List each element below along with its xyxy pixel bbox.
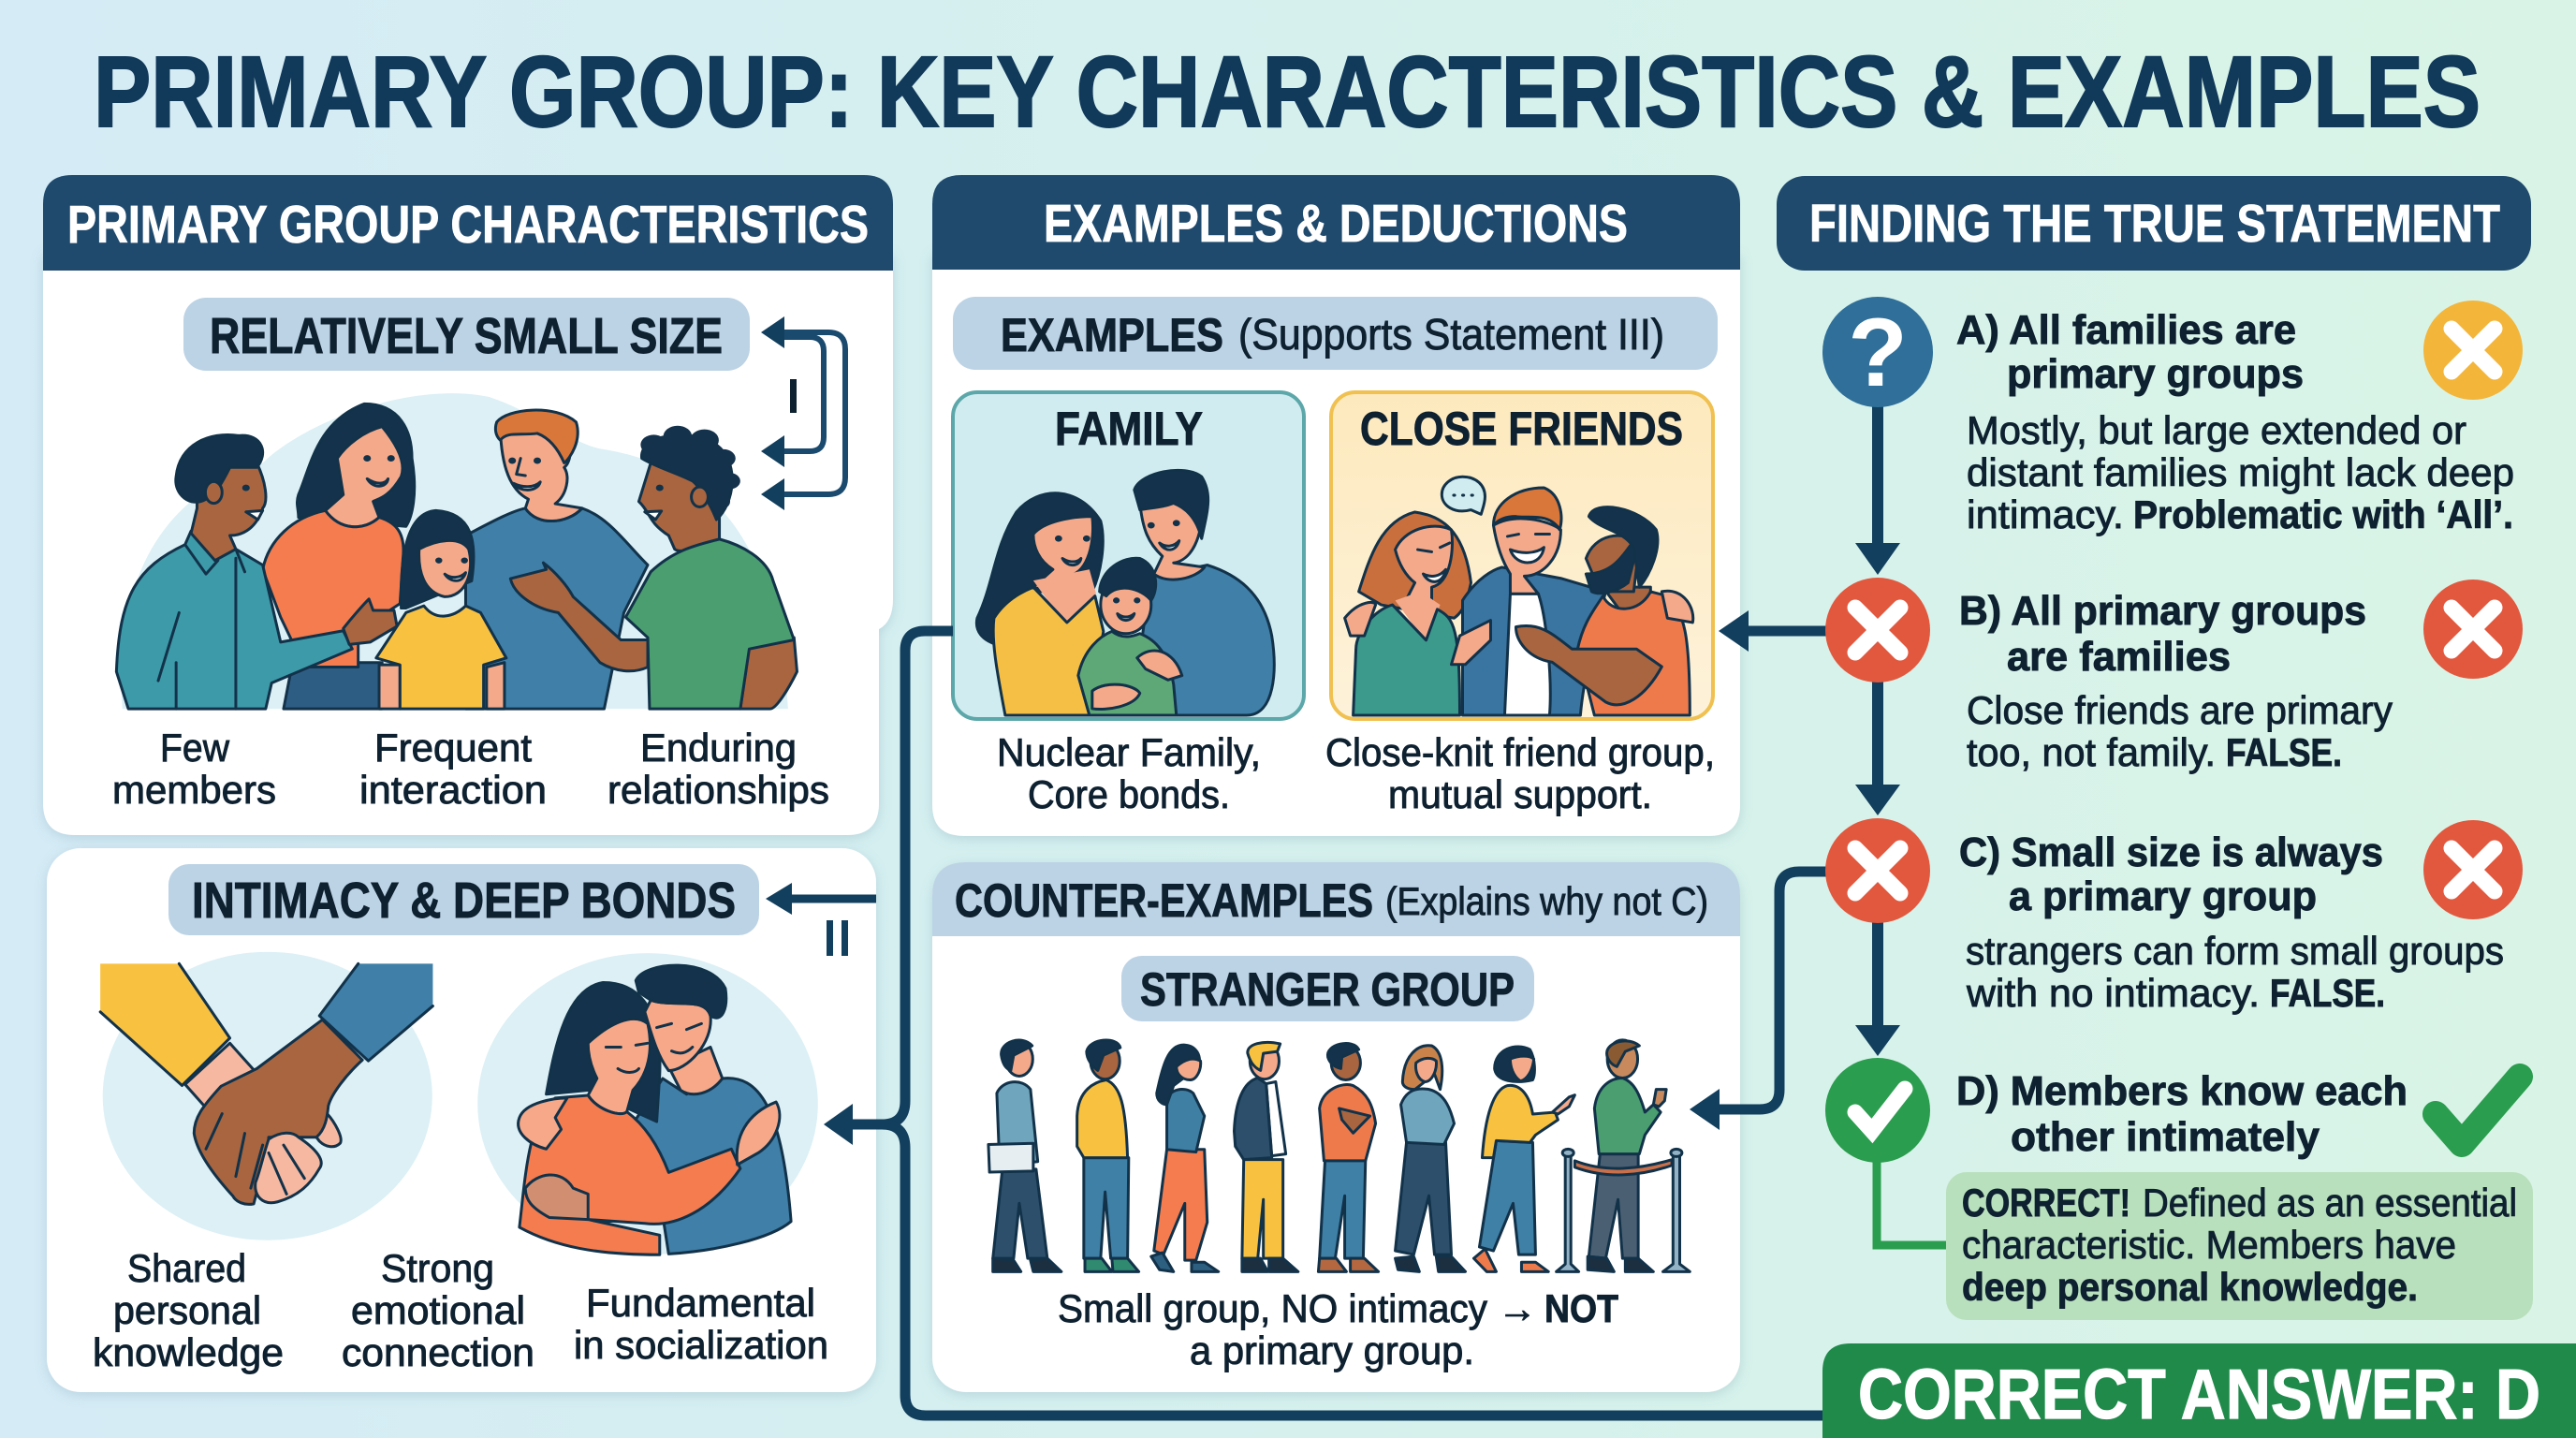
statement C <box>1959 829 2504 1015</box>
panel header <box>43 175 893 271</box>
icon: speech bubble <box>1442 477 1485 514</box>
subheading pill: small size <box>183 298 750 371</box>
panel: finding the true statement <box>1777 176 2533 1320</box>
person 5 <box>1318 1044 1379 1271</box>
illustration: three friends <box>1345 477 1693 715</box>
panel header <box>1777 176 2531 271</box>
heading: EXAMPLES & DEDUCTIONS <box>1044 194 1628 254</box>
statement C: C) Small size is always <box>1959 829 2383 875</box>
statement: small group no intimacy <box>1058 1286 1618 1372</box>
arrows: statement I bracket <box>761 316 845 510</box>
person 1 <box>988 1040 1061 1271</box>
callout: correct explanation: Defined as an essential <box>2143 1181 2517 1225</box>
statement C: strangers can form small groups <box>1966 929 2504 973</box>
statement D: other intimately <box>2011 1114 2320 1160</box>
icon: question mark: ? <box>1848 299 1908 407</box>
icon: question mark <box>1822 297 1933 407</box>
subheading pill: intimacy <box>168 864 759 935</box>
person 8 <box>1588 1040 1666 1271</box>
label: strong emotional connection: connection <box>342 1330 534 1374</box>
person 4 <box>1235 1042 1298 1271</box>
statement A: A) All families are <box>1956 307 2296 353</box>
connector: family, correct answer to intimacy panel <box>824 631 1825 1416</box>
illustration: clasped hands <box>100 952 432 1240</box>
label: shared personal knowledge: personal <box>113 1288 261 1332</box>
card: family <box>953 392 1304 719</box>
panel: examples and deductions <box>932 175 1740 836</box>
label: few members: members <box>112 768 276 812</box>
label: fundamental in socialization <box>574 1281 828 1367</box>
statement B <box>1959 588 2393 774</box>
label: frequent interaction: Frequent <box>374 726 532 770</box>
callout: correct explanation: deep personal knowledge. <box>1962 1265 2418 1309</box>
person 6 <box>1396 1046 1465 1271</box>
panel: intimacy and deep bonds <box>47 848 876 1392</box>
statement: small group no intimacy: Small group, NO intimacy <box>1058 1286 1487 1330</box>
callout: correct explanation: characteristic. Members have <box>1962 1223 2456 1267</box>
statement A: Mostly, but large extended or <box>1967 408 2466 452</box>
arrow: statement II <box>766 883 876 915</box>
icon: green check <box>2436 1077 2520 1144</box>
label: strong emotional connection <box>342 1246 534 1374</box>
subheading text: EXAMPLES <box>1001 309 1223 361</box>
person 3 <box>1151 1045 1219 1271</box>
green connector to correct box <box>1877 1161 1949 1245</box>
subheading text: INTIMACY & DEEP BONDS <box>192 873 736 929</box>
statement D: D) Members know each <box>1956 1068 2408 1114</box>
statement A <box>1956 307 2514 536</box>
statement: small group no intimacy: a primary group. <box>1190 1328 1474 1372</box>
label: enduring relationships: relationships <box>607 768 829 812</box>
person 7 <box>1473 1047 1574 1271</box>
label: enduring relationships <box>607 726 829 812</box>
statement B: FALSE. <box>2226 730 2342 774</box>
illustration: nuclear family <box>976 470 1274 715</box>
band text <box>955 874 1708 927</box>
icon: red x <box>2423 580 2523 679</box>
statement D <box>1956 1068 2408 1160</box>
card title: CLOSE FRIENDS <box>1360 403 1683 455</box>
panel header <box>932 175 1740 270</box>
illustration: group of five people <box>116 393 797 709</box>
label: shared personal knowledge: knowledge <box>93 1330 284 1374</box>
subheading pill: stranger group <box>1121 956 1534 1021</box>
label: strong emotional connection: emotional <box>351 1288 525 1332</box>
label: frequent interaction: interaction <box>359 768 547 812</box>
label: few members: Few <box>160 726 230 770</box>
card: close friends <box>1331 392 1713 719</box>
callout: correct explanation <box>1946 1172 2533 1320</box>
statement B: B) All primary groups <box>1959 588 2366 634</box>
label: fundamental in socialization: Fundamental <box>586 1281 815 1325</box>
label: nuclear family <box>997 730 1261 816</box>
icon: yellow x <box>2423 301 2523 400</box>
label: close-knit friends <box>1325 730 1715 816</box>
panel: counter-examples <box>932 862 1740 1392</box>
statement: small group no intimacy: NOT <box>1544 1286 1618 1330</box>
label: shared personal knowledge: Shared <box>127 1246 246 1290</box>
label: shared personal knowledge <box>93 1246 284 1374</box>
statement B: are families <box>2007 634 2231 680</box>
icon: x on C <box>1825 818 1930 923</box>
label: frequent interaction <box>359 726 547 812</box>
subheading text <box>1001 309 1664 361</box>
statement C: FALSE. <box>2270 971 2385 1015</box>
arrow: statement B to close friends <box>1719 610 1830 652</box>
band text: COUNTER-EXAMPLES <box>955 874 1373 927</box>
statement: small group no intimacy: → <box>1498 1286 1537 1330</box>
statement label I <box>790 379 797 413</box>
band text: (Explains why not C) <box>1385 879 1708 923</box>
statement C: with no intimacy. <box>1966 971 2260 1015</box>
label: close-knit friends: mutual support. <box>1388 772 1652 816</box>
card title: FAMILY <box>1055 403 1203 455</box>
statement B: Close friends are primary <box>1967 688 2393 732</box>
label: close-knit friends: Close-knit friend group, <box>1325 730 1715 774</box>
callout: correct explanation: CORRECT! <box>1962 1181 2130 1225</box>
panel: primary group characteristics <box>43 175 893 835</box>
label: nuclear family: Core bonds. <box>1028 772 1230 816</box>
statement A: Problematic with ‘All’. <box>2133 492 2513 536</box>
arrow: statement C to stranger group <box>1690 872 1830 1130</box>
statement C: a primary group <box>2009 873 2317 919</box>
panel band <box>932 862 1740 936</box>
subheading text: (Supports Statement III) <box>1238 310 1664 359</box>
illustration: strangers standing in line <box>988 1040 1690 1271</box>
statement A: intimacy. <box>1967 492 2124 536</box>
subheading text: STRANGER GROUP <box>1140 963 1515 1016</box>
label: few members <box>112 726 276 812</box>
icon: x on B <box>1825 578 1930 682</box>
subheading pill: examples <box>953 297 1718 370</box>
statement B: too, not family. <box>1967 730 2216 774</box>
label: strong emotional connection: Strong <box>381 1246 494 1290</box>
label: nuclear family: Nuclear Family, <box>997 730 1261 774</box>
subheading text: RELATIVELY SMALL SIZE <box>210 308 723 364</box>
statement label II <box>827 920 848 956</box>
statement A: distant families might lack deep <box>1967 450 2514 494</box>
flow arrows <box>1855 403 1900 1056</box>
statement A: primary groups <box>2007 351 2304 397</box>
icon: red x <box>2423 820 2523 919</box>
heading: PRIMARY GROUP CHARACTERISTICS <box>67 195 869 255</box>
label: fundamental in socialization: in socialization <box>574 1323 828 1367</box>
label: enduring relationships: Enduring <box>640 726 797 770</box>
illustration: hugging couple <box>477 953 818 1255</box>
stanchion and rope <box>1557 1149 1690 1271</box>
person 2 <box>1077 1040 1139 1271</box>
icon: check on D <box>1825 1058 1930 1163</box>
